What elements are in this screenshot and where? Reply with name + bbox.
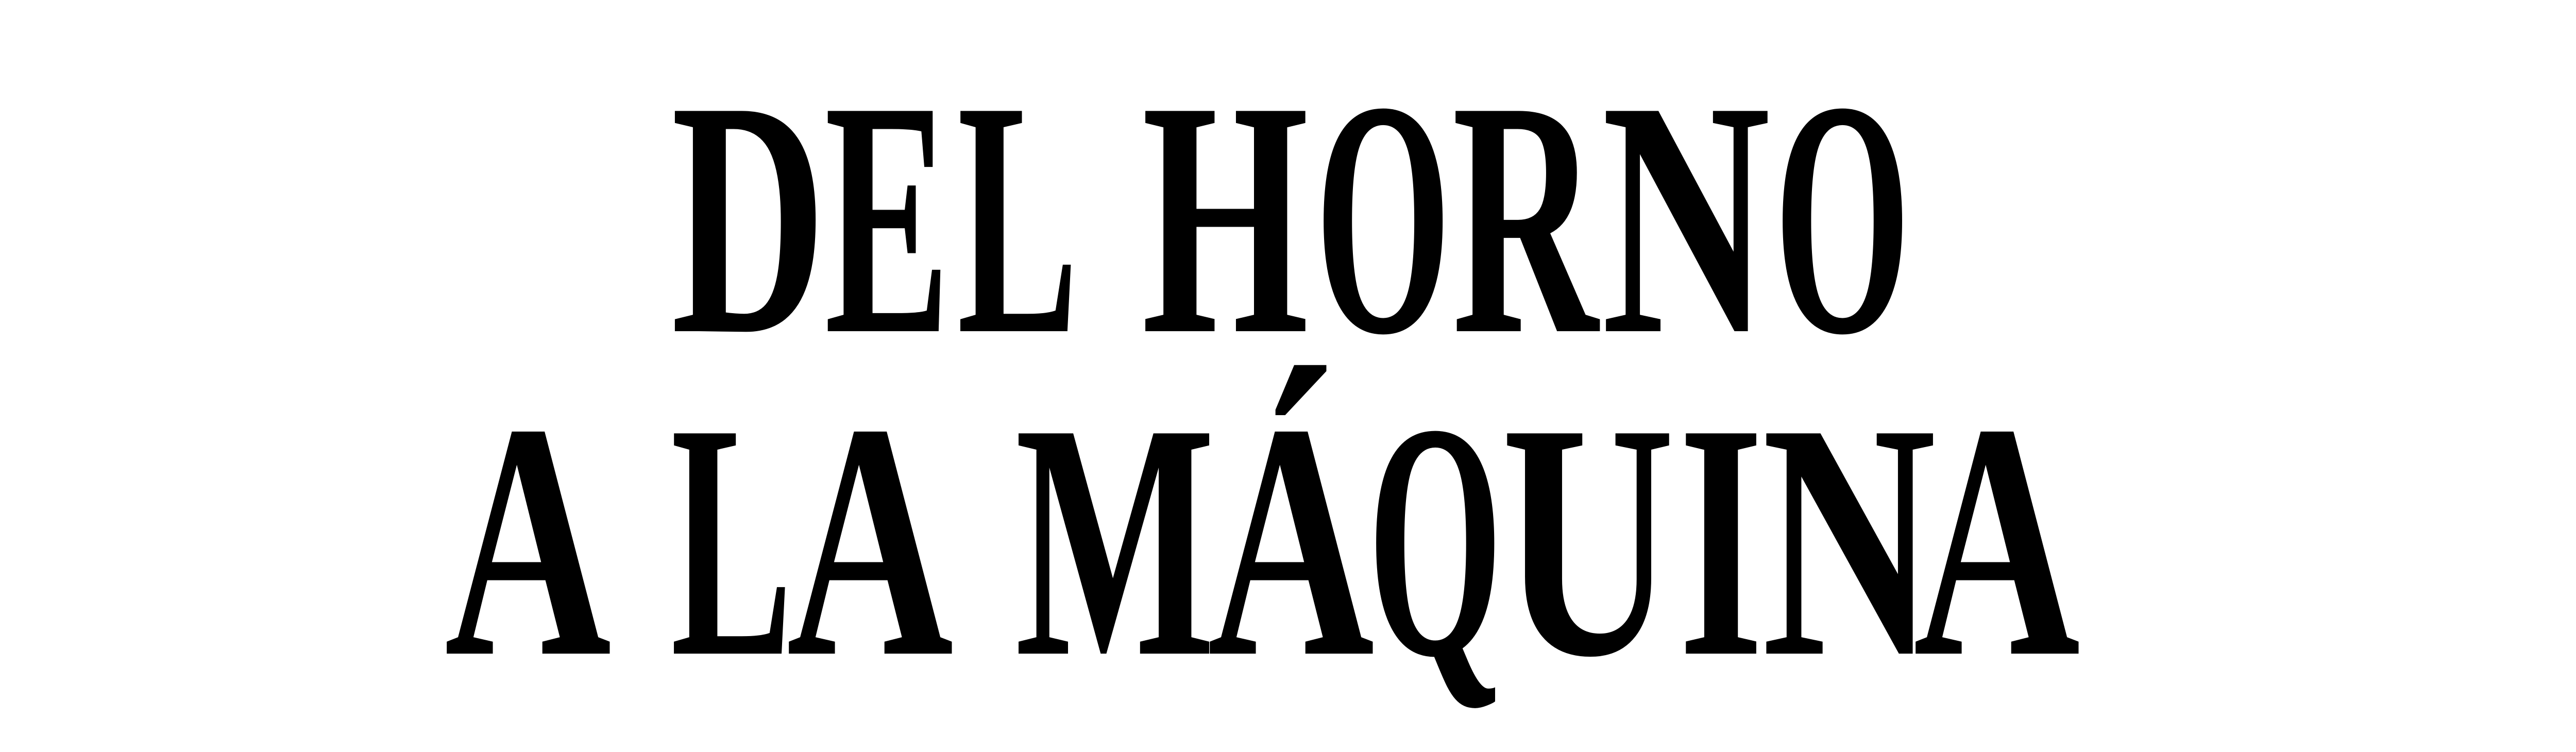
title line 1: DEL HORNO: L xyxy=(957,31,1078,404)
title line 2: A LA MÁQUINA: U xyxy=(1501,354,1675,726)
title line 2: A LA MÁQUINA: A xyxy=(445,355,612,727)
title line 2: A LA MÁQUINA: Á xyxy=(1208,355,1375,727)
title line 1: DEL HORNO: E xyxy=(824,32,950,404)
title line 2: A LA MÁQUINA: L xyxy=(671,354,793,727)
title line 1: DEL HORNO: R xyxy=(1452,31,1601,404)
title line 1: DEL HORNO: O xyxy=(1774,31,1911,404)
title line 1: DEL HORNO xyxy=(671,31,1911,404)
title line 1: DEL HORNO: H xyxy=(1142,31,1309,404)
title line 1: DEL HORNO: D xyxy=(671,32,826,404)
title line 1: DEL HORNO: O xyxy=(1315,31,1451,404)
title line 1: DEL HORNO: N xyxy=(1601,31,1771,404)
title line 2: A LA MÁQUINA: N xyxy=(1762,354,1936,726)
title line 2: A LA MÁQUINA: I xyxy=(1679,354,1764,727)
title line 2: A LA MÁQUINA: A xyxy=(787,355,954,727)
title line 2: A LA MÁQUINA: A xyxy=(1913,355,2080,727)
title line 2: A LA MÁQUINA: M xyxy=(1015,354,1215,727)
title line 2: A LA MÁQUINA xyxy=(445,354,2080,727)
title line 2: A LA MÁQUINA: Q xyxy=(1368,354,1503,727)
